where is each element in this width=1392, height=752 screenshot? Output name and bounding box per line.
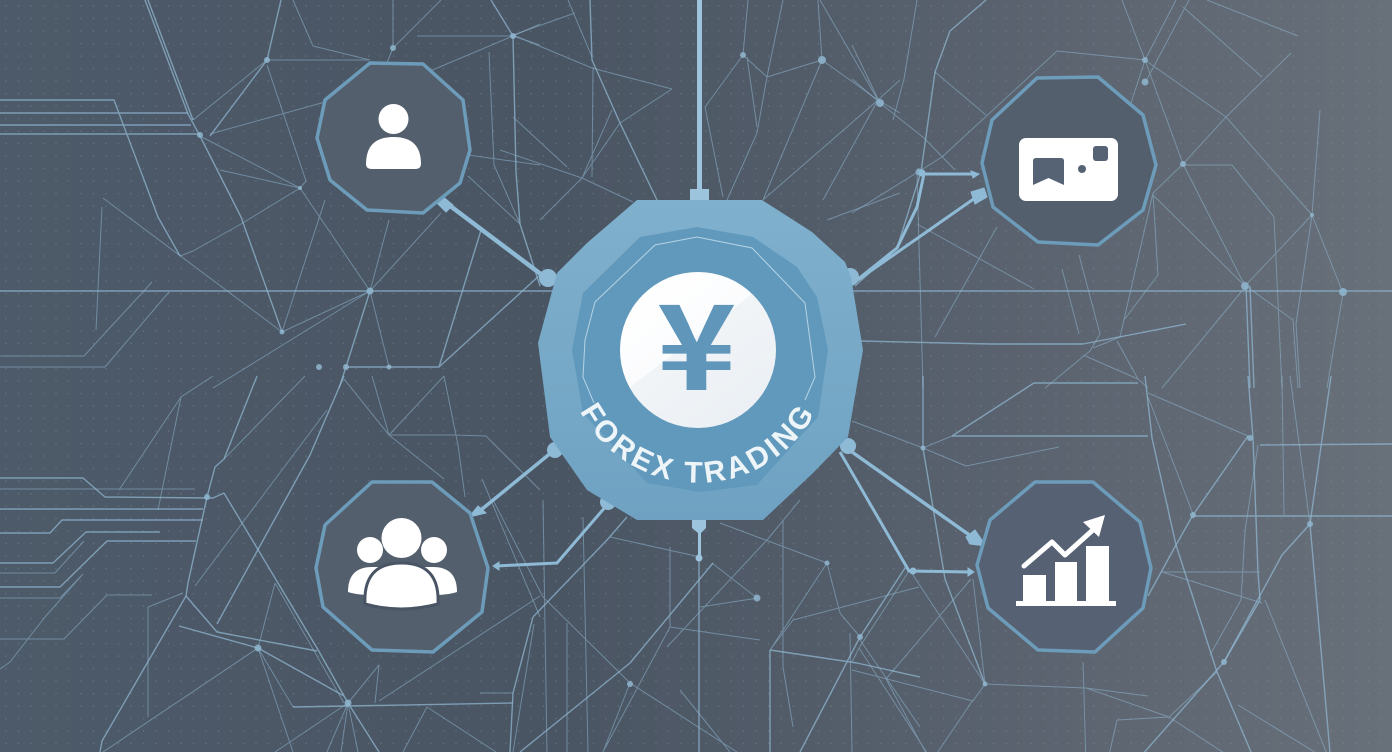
curved label: FOREX TRADING <box>580 402 812 483</box>
connector: top left <box>437 195 557 287</box>
node: growth chart <box>977 482 1151 652</box>
hub thin ring line <box>583 237 815 403</box>
coin disc <box>620 272 776 428</box>
connector: bottom <box>692 519 706 562</box>
icon: card <box>1019 138 1118 201</box>
central hub <box>538 200 863 520</box>
connector: top right <box>841 170 987 286</box>
connector: bottom left <box>469 442 616 570</box>
node: person <box>317 63 470 213</box>
connector: bottom right <box>840 438 986 576</box>
node: group <box>316 482 488 652</box>
connector: top <box>690 0 709 201</box>
node: card <box>982 77 1156 245</box>
icon: person <box>366 104 421 169</box>
icon: group <box>348 518 457 609</box>
network nodes <box>197 33 1347 752</box>
hub inner ring <box>572 227 828 492</box>
yen symbol: ¥ <box>656 254 737 424</box>
icon: growth chart <box>1016 515 1116 606</box>
